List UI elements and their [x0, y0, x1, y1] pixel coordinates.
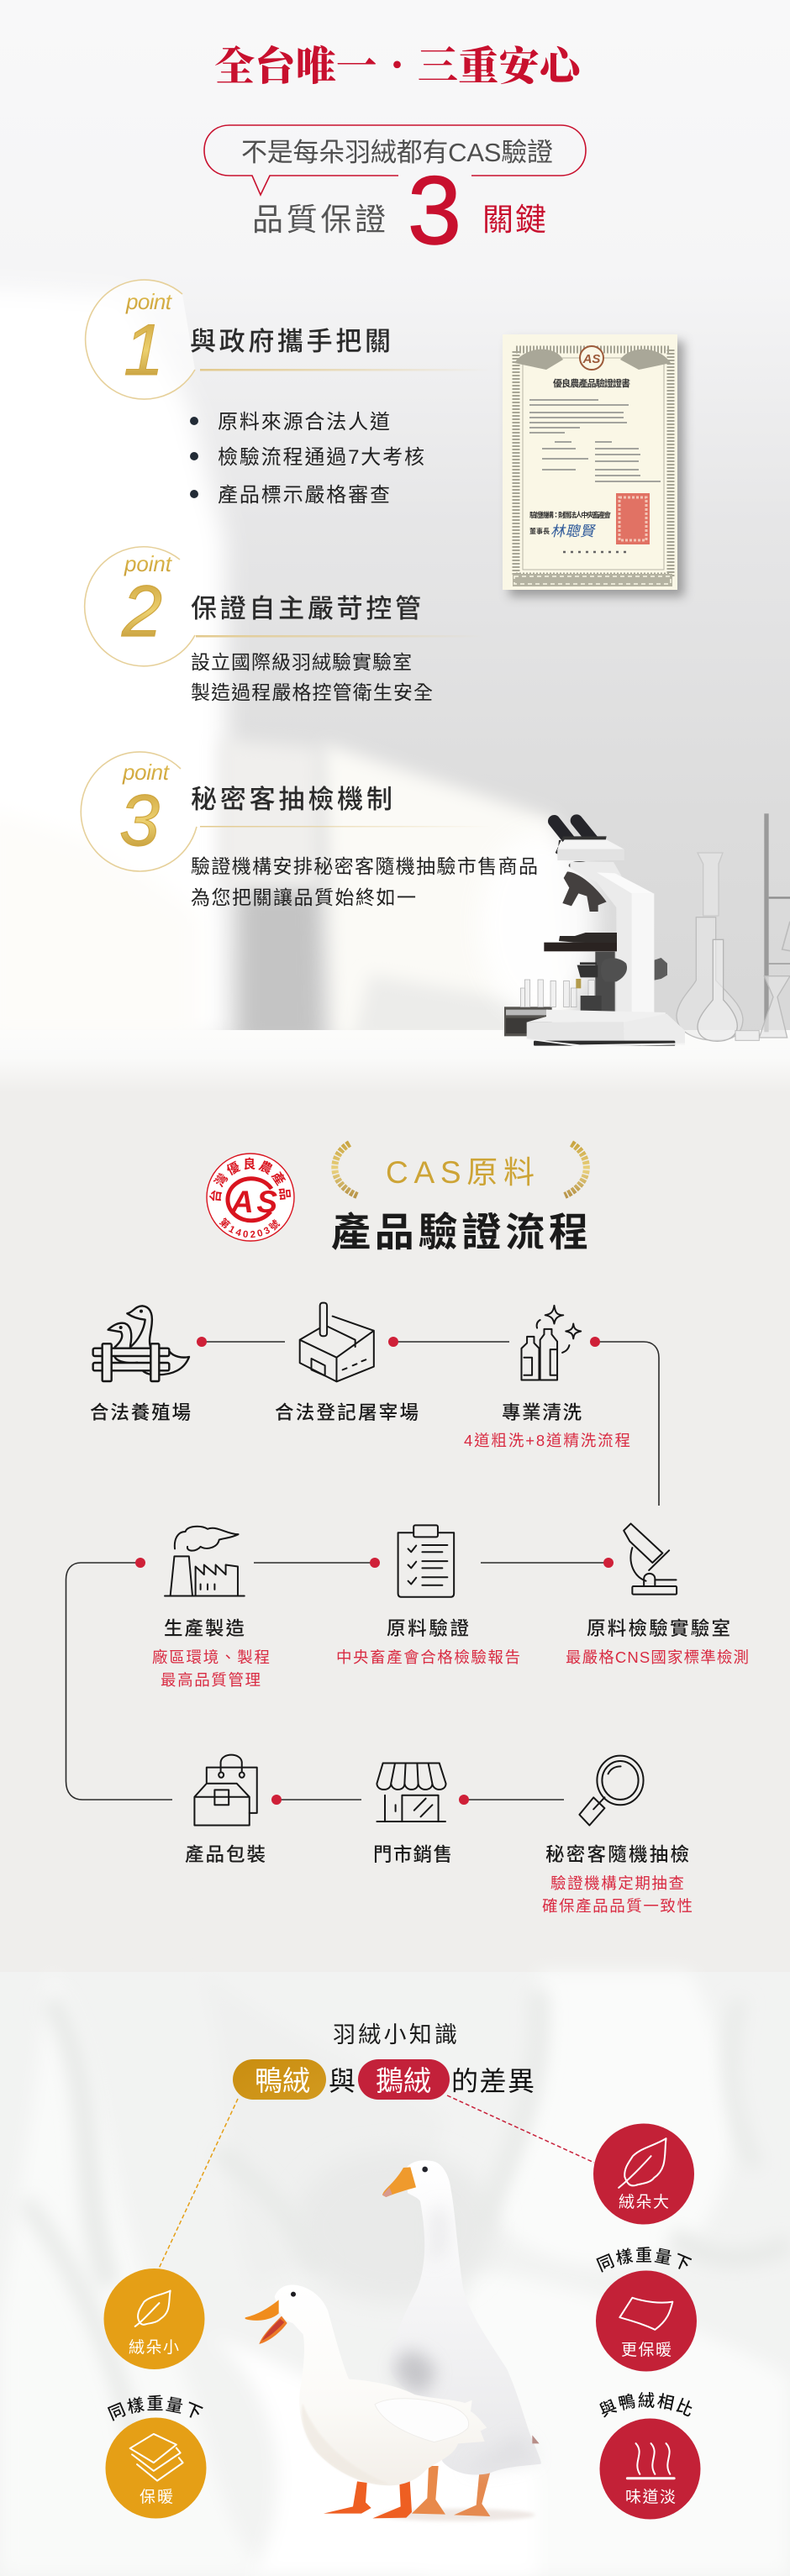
icon: geese behind fence	[93, 1306, 189, 1381]
label: 專業清洗	[502, 1402, 582, 1423]
certificate	[503, 334, 684, 597]
number 1: 1	[124, 310, 164, 391]
icon: odor waves	[627, 2443, 674, 2479]
body text: 製造過程嚴格控管衛生安全	[191, 681, 433, 703]
note: 中央畜產會合格檢驗報告	[336, 1648, 520, 1666]
background: white fabric	[0, 1972, 790, 2576]
heading: 秘密客抽檢機制	[191, 785, 392, 814]
trait: warmer: 更保暖	[621, 2341, 672, 2359]
bubble text: 不是每朵羽絨都有CAS驗證	[241, 138, 553, 167]
bullet list	[190, 411, 424, 507]
label: 產品包裝	[185, 1844, 266, 1865]
pill: duck down	[233, 2059, 326, 2100]
note	[152, 1648, 270, 1689]
icon: storefront	[377, 1764, 446, 1822]
arc caption: 同樣重量下	[108, 2395, 203, 2421]
icon: thin blanket	[619, 2298, 672, 2330]
red seal	[616, 493, 650, 544]
certificate: AS	[582, 352, 600, 366]
heading: 與政府攜手把關	[190, 327, 391, 356]
CAS badge	[206, 1153, 295, 1242]
body text	[191, 651, 433, 703]
section title: 產品驗證流程	[331, 1210, 588, 1254]
label: 原料驗證	[387, 1618, 469, 1639]
illustration: microscope	[504, 821, 685, 1047]
body text: 為您把關讓品質始終如一	[191, 886, 416, 908]
illustration: goose	[378, 2160, 541, 2521]
bullet list: 產品標示嚴格審查	[218, 484, 390, 507]
note: 廠區環境、製程	[152, 1648, 270, 1666]
illustration: glassware	[677, 813, 790, 1041]
laurel right	[565, 1143, 587, 1196]
trait: warm: 保暖	[140, 2488, 173, 2506]
illustration: duck	[245, 2284, 487, 2518]
panel: goose traits	[593, 2124, 701, 2519]
point label: point	[125, 289, 173, 314]
connector word: 與	[329, 2066, 356, 2096]
icon: manufacturing factory	[165, 1527, 245, 1596]
certificate title: 優良農產品驗證證書	[553, 377, 630, 389]
heading: 保證自主嚴苛控管	[191, 594, 421, 623]
point 2 ring	[85, 547, 195, 666]
pill: goose down: 鵝絨	[376, 2065, 431, 2096]
laurel left	[334, 1143, 357, 1196]
certifying body: 驗證機構：財團法人中央畜產會	[529, 511, 611, 519]
subtitle left: 品質保證	[252, 202, 386, 237]
note: 最嚴格CNS國家標準檢測	[566, 1648, 749, 1666]
trait: larger down	[593, 2124, 694, 2225]
note	[542, 1874, 693, 1915]
trait: smaller down	[104, 2268, 205, 2369]
trait: warm	[106, 2418, 207, 2519]
signature: 林聰賢	[550, 523, 596, 539]
icon: packaged bag	[194, 1755, 257, 1826]
body text: 設立國際級羽絨驗實驗室	[191, 651, 412, 673]
label: 秘密客隨機抽檢	[545, 1844, 689, 1865]
bullet list: 原料來源合法人道	[218, 411, 390, 434]
bullet list: 檢驗流程通過7大考核	[218, 446, 424, 469]
icon: lab microscope	[624, 1523, 677, 1595]
icon: cleaning bottles	[521, 1306, 581, 1380]
icon: layered blankets	[130, 2434, 183, 2481]
trait: less odor	[600, 2418, 701, 2519]
icon: magnifier	[579, 1756, 644, 1826]
trait: less odor: 味道淡	[625, 2488, 676, 2506]
trait: smaller down: 絨朵小	[129, 2338, 179, 2357]
number 3: 3	[119, 781, 160, 861]
big number 3: 3	[408, 157, 461, 265]
icon: clipboard	[398, 1525, 454, 1597]
label: 生產製造	[164, 1618, 245, 1639]
panel: point 1	[86, 280, 492, 507]
subtitle CAS: CAS原料	[386, 1155, 535, 1190]
arc caption: 同樣重量下	[596, 2247, 693, 2273]
note: 最高品質管理	[161, 1671, 261, 1689]
comparison heading	[233, 2059, 535, 2100]
flow dots	[135, 1337, 614, 1805]
badge bottom text: 第140203號	[219, 1217, 281, 1238]
title: 全台唯一‧三重安心	[214, 45, 587, 89]
panel: point 3	[81, 752, 538, 908]
panel: point 2	[85, 547, 484, 703]
background: upper lab wall	[0, 0, 790, 1092]
trait: warmer	[596, 2270, 697, 2371]
background: process section	[0, 1092, 790, 1972]
point 3 ring	[81, 752, 197, 871]
label: 門市銷售	[373, 1844, 452, 1865]
AS logo letters: AS	[230, 1185, 277, 1219]
number 2: 2	[121, 571, 162, 652]
note: 4道粗洗+8道精洗流程	[464, 1432, 630, 1449]
note: 驗證機構定期抽查	[550, 1874, 684, 1892]
icon: registered slaughterhouse	[300, 1303, 374, 1381]
body text: 驗證機構安排秘密客隨機抽驗市售商品	[191, 855, 538, 877]
body text	[191, 855, 538, 908]
icon: feather	[619, 2138, 666, 2188]
point label: point	[122, 760, 171, 785]
closing words: 的差異	[451, 2066, 535, 2096]
flow connector lines	[66, 1342, 659, 1800]
point label: point	[124, 551, 173, 576]
speech bubble outline	[204, 125, 586, 195]
trait: larger down: 絨朵大	[619, 2193, 669, 2211]
arc caption: 與鴨絨相比	[599, 2392, 693, 2418]
chairman: 董事長	[529, 527, 550, 535]
small heading: 羽絨小知識	[333, 2022, 457, 2048]
label: 合法養殖場	[90, 1402, 191, 1423]
point 1 ring	[86, 280, 195, 399]
label: 原料檢驗實驗室	[587, 1618, 730, 1639]
icon: small feather	[135, 2290, 171, 2326]
note: 確保產品品質一致性	[542, 1897, 693, 1915]
dashed line: goose	[447, 2095, 594, 2163]
label: 合法登記屠宰場	[275, 1402, 419, 1423]
badge top text: 台灣優良農產品	[209, 1158, 291, 1201]
dashed line: duck	[159, 2099, 238, 2268]
panel: duck traits	[104, 2268, 207, 2519]
subtitle right: 關鍵	[482, 202, 546, 237]
pill: duck down: 鴨絨	[255, 2065, 310, 2096]
pill: goose down	[358, 2059, 450, 2100]
